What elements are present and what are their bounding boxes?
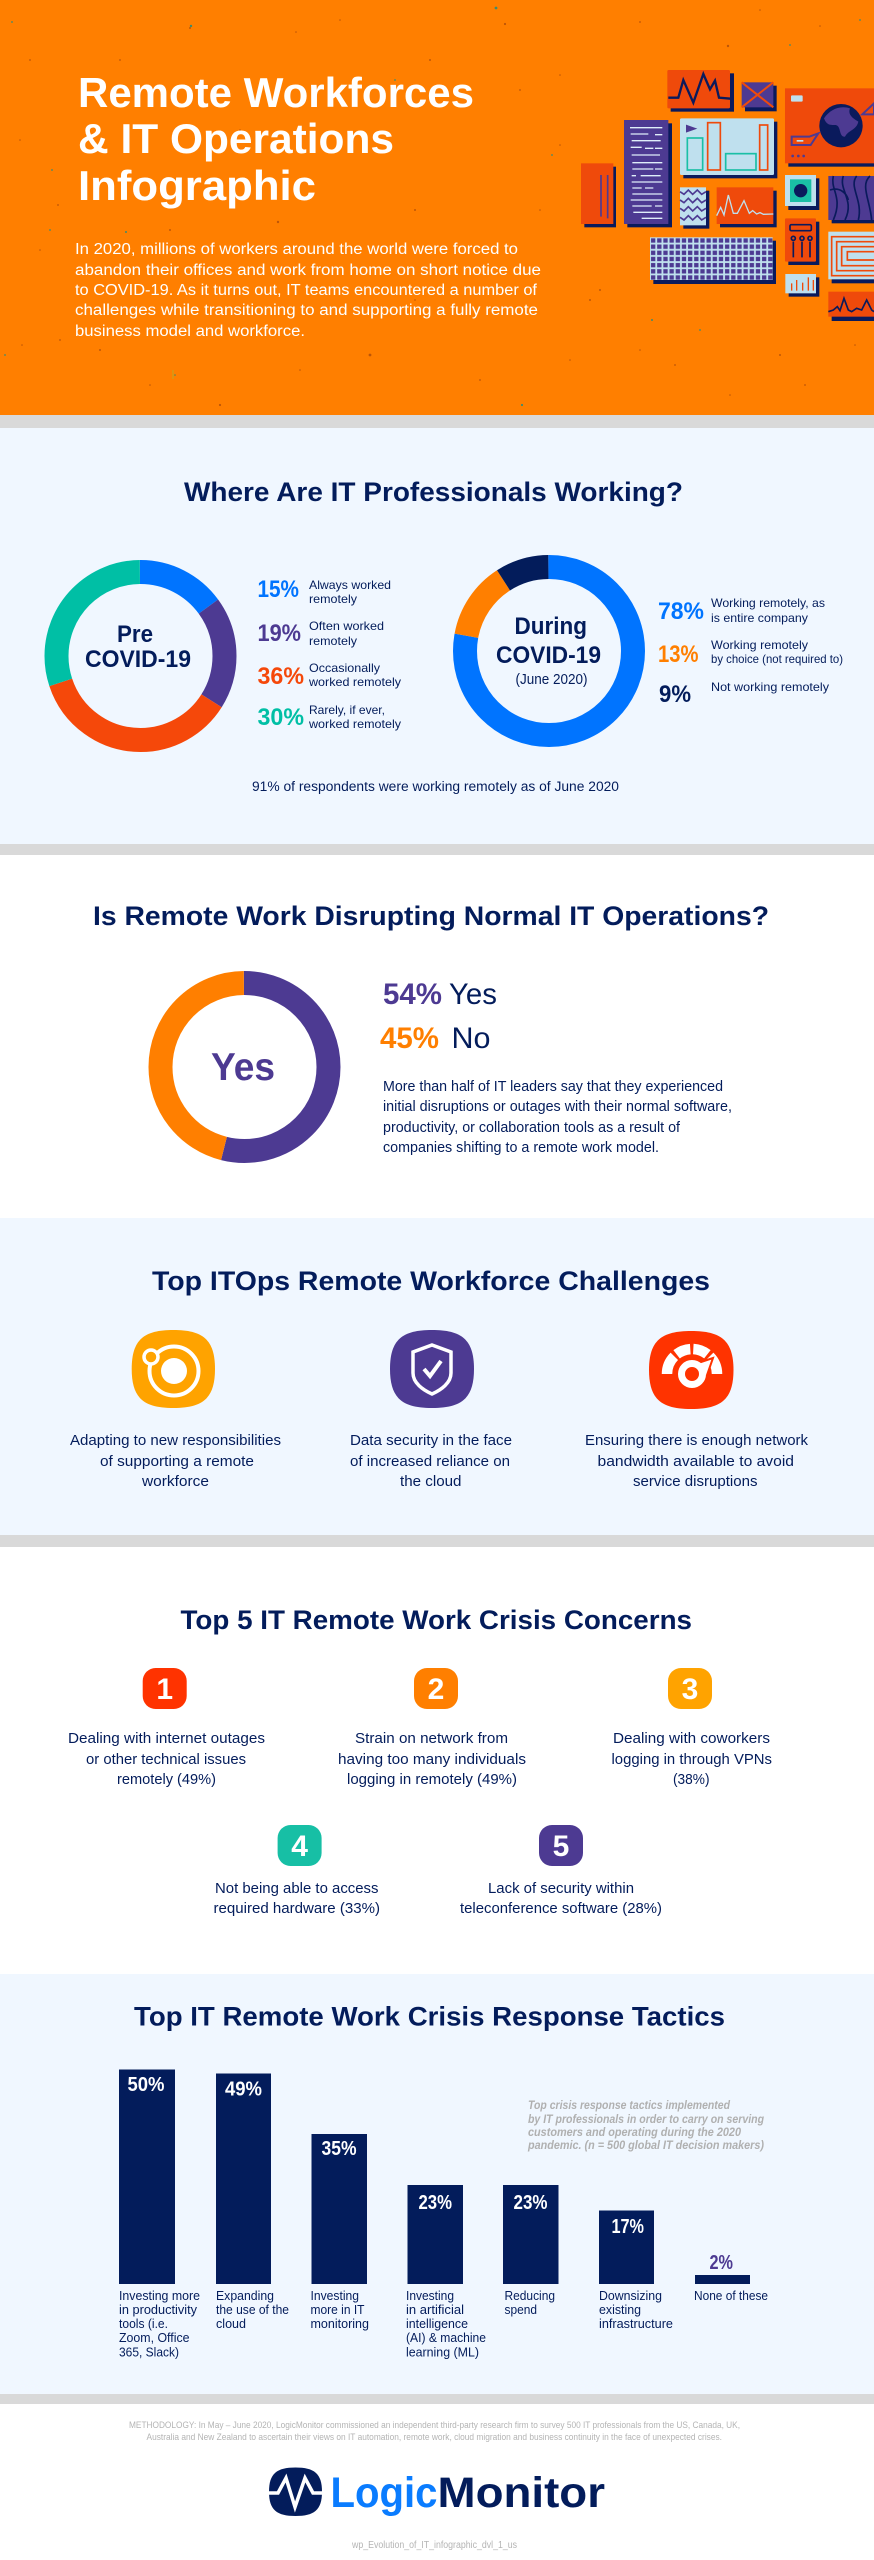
bar: IT monitoring 35% xyxy=(310,2134,369,2331)
heading: Top ITOps Remote Workforce Challenges xyxy=(152,1266,710,1296)
bar: none of these 2%: 2% xyxy=(710,2252,733,2274)
heading: Where Are IT Professionals Working? xyxy=(184,477,683,507)
heading: hero title xyxy=(78,69,474,209)
text: concern 4 xyxy=(214,1880,380,1917)
panel: top 5 IT remote work crisis concerns xyxy=(0,1547,874,1974)
text: challenge 1 xyxy=(70,1432,281,1490)
text: challenge 1: Adapting to new responsibilities xyxy=(70,1432,281,1449)
text: concern 3: logging in through VPNs xyxy=(612,1751,772,1768)
note: survey description: pandemic. (n = 500 global IT decision makers) xyxy=(527,2138,764,2152)
bar: AI and machine learning 23% xyxy=(406,2185,486,2360)
text: concern 3: Dealing with coworkers xyxy=(613,1730,770,1747)
text: concern 5: teleconference software (28%) xyxy=(460,1900,662,1917)
legend: pre COVID-19: 15% xyxy=(258,576,299,603)
text: challenge 2 xyxy=(350,1432,512,1490)
icon: shield xyxy=(390,1330,474,1408)
bar: expanding cloud 49%: Expanding xyxy=(216,2288,274,2303)
text block: disruption summary: More than half of IT leaders say that they experienced xyxy=(383,1078,723,1095)
legend: pre COVID-19: worked remotely xyxy=(308,717,401,731)
bar: productivity tools 50% xyxy=(119,2070,200,2360)
text block: hero intro: abandon their offices and work from home on short notice due xyxy=(75,262,541,279)
bar: AI and machine learning 23%: intelligence xyxy=(406,2316,468,2331)
badge: 1: 1 xyxy=(156,1673,173,1706)
badge: 1 xyxy=(143,1668,187,1709)
icon: gauge xyxy=(649,1331,734,1409)
logo: LogicMonitor xyxy=(269,2468,605,2517)
bar: none of these 2% xyxy=(694,2252,768,2303)
heading: hero title: Remote Workforces xyxy=(78,69,474,116)
text: concern 2: logging in remotely (49%) xyxy=(347,1771,517,1788)
panel: hero header xyxy=(0,0,874,415)
badge: 3 xyxy=(668,1668,712,1709)
bar: AI and machine learning 23%: learning (ML) xyxy=(406,2344,479,2360)
donut label: during COVID-19 xyxy=(496,613,601,688)
badge: 5 xyxy=(539,1825,583,1866)
bar: reducing spend 23% xyxy=(503,2185,558,2317)
text: concern 3 xyxy=(612,1730,772,1788)
bar: reducing spend 23%: 23% xyxy=(514,2192,548,2214)
text block: disruption summary xyxy=(383,1078,732,1156)
donut label: yes: Yes xyxy=(211,1046,275,1089)
text block: methodology xyxy=(129,2420,740,2443)
illustration: IT dashboard collage xyxy=(581,70,874,321)
text: concern 2: Strain on network from xyxy=(355,1730,508,1747)
legend: during COVID-19: Working remotely xyxy=(711,638,808,652)
text block: disruption summary: companies shifting to a remote work model. xyxy=(383,1139,659,1156)
text: challenge 3: service disruptions xyxy=(633,1473,758,1490)
bar: downsizing infrastructure 17%: 17% xyxy=(612,2216,644,2238)
donut chart: pre COVID-19 xyxy=(56,572,224,740)
donut chart: yes vs no xyxy=(160,983,328,1151)
bar: productivity tools 50%: 50% xyxy=(128,2074,165,2096)
donut label: pre COVID-19: COVID-19 xyxy=(85,646,191,673)
legend: pre COVID-19: remotely xyxy=(309,592,357,606)
bar: downsizing infrastructure 17%: infrastructure xyxy=(599,2316,673,2331)
text: concern 1: Dealing with internet outages xyxy=(68,1730,265,1747)
donut label: pre COVID-19: Pre xyxy=(117,621,153,648)
text block: hero intro: challenges while transitioning to and supporting a fully remote xyxy=(75,302,538,319)
legend: pre COVID-19: Often worked xyxy=(309,619,384,633)
legend: during COVID-19: is entire company xyxy=(711,611,808,625)
panel: top IT remote work crisis response tactics xyxy=(0,1974,874,2394)
bar: reducing spend 23%: spend xyxy=(504,2302,537,2317)
stat: 45% no xyxy=(380,1022,490,1055)
stat: 54% yes: 54% xyxy=(383,978,442,1011)
bar: reducing spend 23%: Reducing xyxy=(504,2288,555,2303)
bar: productivity tools 50%: Investing more xyxy=(119,2288,200,2303)
badge: 2: 2 xyxy=(428,1673,444,1706)
note: survey description: customers and operating during the 2020 xyxy=(528,2125,741,2139)
text: concern 1: or other technical issues xyxy=(86,1751,246,1768)
bar: AI and machine learning 23%: 23% xyxy=(418,2192,452,2214)
legend: during COVID-19: by choice (not required to) xyxy=(711,652,843,666)
text block: disruption summary: initial disruptions or outages with their normal software, xyxy=(383,1098,732,1115)
bar: IT monitoring 35%: monitoring xyxy=(310,2316,369,2331)
logo: LogicMonitor: Monitor xyxy=(438,2469,605,2517)
text: concern 5 xyxy=(460,1880,662,1917)
bar: downsizing infrastructure 17%: Downsizing xyxy=(599,2288,662,2303)
badge: 5: 5 xyxy=(553,1830,569,1863)
badge: 2 xyxy=(414,1668,458,1709)
bar: productivity tools 50%: in productivity xyxy=(119,2302,197,2317)
legend: pre COVID-19 xyxy=(258,576,401,731)
text block: disruption summary: productivity, or collaboration tools as a result of xyxy=(383,1119,681,1136)
panel: top ITOps remote workforce challenges xyxy=(0,1218,874,1535)
bar: AI and machine learning 23%: (AI) & machine xyxy=(406,2330,486,2345)
bar: expanding cloud 49%: cloud xyxy=(216,2316,246,2331)
bar: downsizing infrastructure 17%: existing xyxy=(599,2302,641,2317)
note: survey description: Top crisis response tactics implemented xyxy=(528,2098,731,2112)
legend: pre COVID-19: 19% xyxy=(258,620,301,647)
legend: pre COVID-19: 36% xyxy=(258,663,304,690)
bar: IT monitoring 35%: more in IT xyxy=(310,2302,365,2317)
legend: during COVID-19 xyxy=(658,596,843,708)
legend: pre COVID-19: Rarely, if ever, xyxy=(309,703,385,717)
heading: Top IT Remote Work Crisis Response Tactics xyxy=(134,2002,725,2032)
stat: 54% yes: Yes xyxy=(449,978,497,1011)
legend: during COVID-19: Working remotely, as xyxy=(711,596,825,610)
bar: none of these 2%: None of these xyxy=(694,2288,768,2303)
text block: hero intro: business model and workforce. xyxy=(75,323,305,340)
text: challenge 1: workforce xyxy=(141,1473,209,1490)
legend: pre COVID-19: remotely xyxy=(309,634,357,648)
text block: hero intro: to COVID-19. As it turns out, IT teams encountered a number of xyxy=(75,282,538,299)
bar chart: response tactics xyxy=(119,2070,768,2360)
text: challenge 2: Data security in the face xyxy=(350,1432,512,1449)
legend: during COVID-19: 13% xyxy=(658,641,698,668)
text: concern 4: Not being able to access xyxy=(215,1880,378,1897)
text: concern 1: remotely (49%) xyxy=(117,1771,216,1788)
note: survey description: by IT professionals in order to carry on serving xyxy=(528,2112,765,2126)
text: concern 4: required hardware (33%) xyxy=(214,1900,380,1917)
badge: 4 xyxy=(278,1825,322,1866)
bar: IT monitoring 35%: Investing xyxy=(310,2288,359,2303)
badge: 4: 4 xyxy=(291,1830,308,1863)
bar: expanding cloud 49%: 49% xyxy=(225,2078,262,2100)
text: challenge 1: of supporting a remote xyxy=(100,1453,254,1470)
heading: Top 5 IT Remote Work Crisis Concerns xyxy=(180,1605,692,1635)
bar: AI and machine learning 23%: in artificial xyxy=(406,2302,464,2317)
footer code: wp_Evolution_of_IT_infographic_dvl_1_us xyxy=(351,2540,517,2551)
heading: hero title: Infographic xyxy=(78,162,316,209)
note: survey description xyxy=(527,2098,765,2152)
bar: downsizing infrastructure 17% xyxy=(599,2210,673,2331)
text block: hero intro xyxy=(75,241,541,340)
bar: productivity tools 50%: tools (i.e. xyxy=(119,2316,168,2331)
bar: productivity tools 50%: Zoom, Office xyxy=(119,2330,190,2345)
legend: pre COVID-19: Occasionally xyxy=(309,661,380,675)
text: concern 5: Lack of security within xyxy=(488,1880,634,1897)
bar: productivity tools 50%: 365, Slack) xyxy=(119,2344,179,2360)
text: concern 3: (38%) xyxy=(673,1771,710,1788)
stat: 45% no: 45% xyxy=(380,1022,439,1055)
heading: hero title: & IT Operations xyxy=(78,115,394,162)
donut label: during COVID-19: (June 2020) xyxy=(516,672,588,688)
text: concern 2 xyxy=(338,1730,526,1788)
donut label: during COVID-19: COVID-19 xyxy=(496,642,601,669)
icon: orbit xyxy=(132,1330,215,1408)
bar: IT monitoring 35%: 35% xyxy=(322,2138,357,2160)
stat: 45% no: No xyxy=(452,1022,490,1055)
donut chart: during COVID-19 xyxy=(465,567,633,735)
logo: LogicMonitor: Logic xyxy=(330,2469,438,2517)
legend: during COVID-19: 9% xyxy=(659,681,691,708)
text block: methodology: Australia and New Zealand to ascertain their views on IT automation, remote work, cloud migration and business continuity in the face of unexpected crises. xyxy=(146,2432,722,2443)
heading: Is Remote Work Disrupting Normal IT Operations? xyxy=(93,901,769,931)
text: concern 2: having too many individuals xyxy=(338,1751,526,1768)
callout: 91% of respondents: 91% of respondents were working remotely as of June 2020 xyxy=(252,779,619,794)
bar: expanding cloud 49%: the use of the xyxy=(216,2302,289,2317)
text: challenge 3: Ensuring there is enough network xyxy=(585,1432,808,1449)
text: challenge 3: bandwidth available to avoid xyxy=(598,1453,794,1470)
panel: where IT professionals are working xyxy=(0,428,874,844)
bar: expanding cloud 49% xyxy=(216,2074,289,2331)
text block: hero intro: In 2020, millions of workers around the world were forced to xyxy=(75,241,518,258)
legend: pre COVID-19: 30% xyxy=(258,704,304,731)
text: challenge 2: the cloud xyxy=(400,1473,462,1490)
legend: during COVID-19: 78% xyxy=(658,598,704,625)
bar: AI and machine learning 23%: Investing xyxy=(406,2288,454,2303)
text: challenge 3 xyxy=(585,1432,808,1490)
donut label: during COVID-19: During xyxy=(514,613,587,640)
text: challenge 2: of increased reliance on xyxy=(350,1453,510,1470)
text block: methodology: METHODOLOGY: In May – June 2020, LogicMonitor commissioned an independent third-party research firm to survey 500 IT professionals from the US, Canada, UK, xyxy=(129,2420,740,2431)
text: concern 1 xyxy=(68,1730,265,1788)
panel: is remote work disrupting IT operations xyxy=(0,855,874,1218)
donut label: pre COVID-19 xyxy=(85,621,191,673)
legend: pre COVID-19: Always worked xyxy=(309,578,391,592)
legend: during COVID-19: Not working remotely xyxy=(711,680,829,694)
badge: 3: 3 xyxy=(682,1673,698,1706)
stat: 54% yes xyxy=(383,978,497,1011)
legend: pre COVID-19: worked remotely xyxy=(308,675,401,689)
